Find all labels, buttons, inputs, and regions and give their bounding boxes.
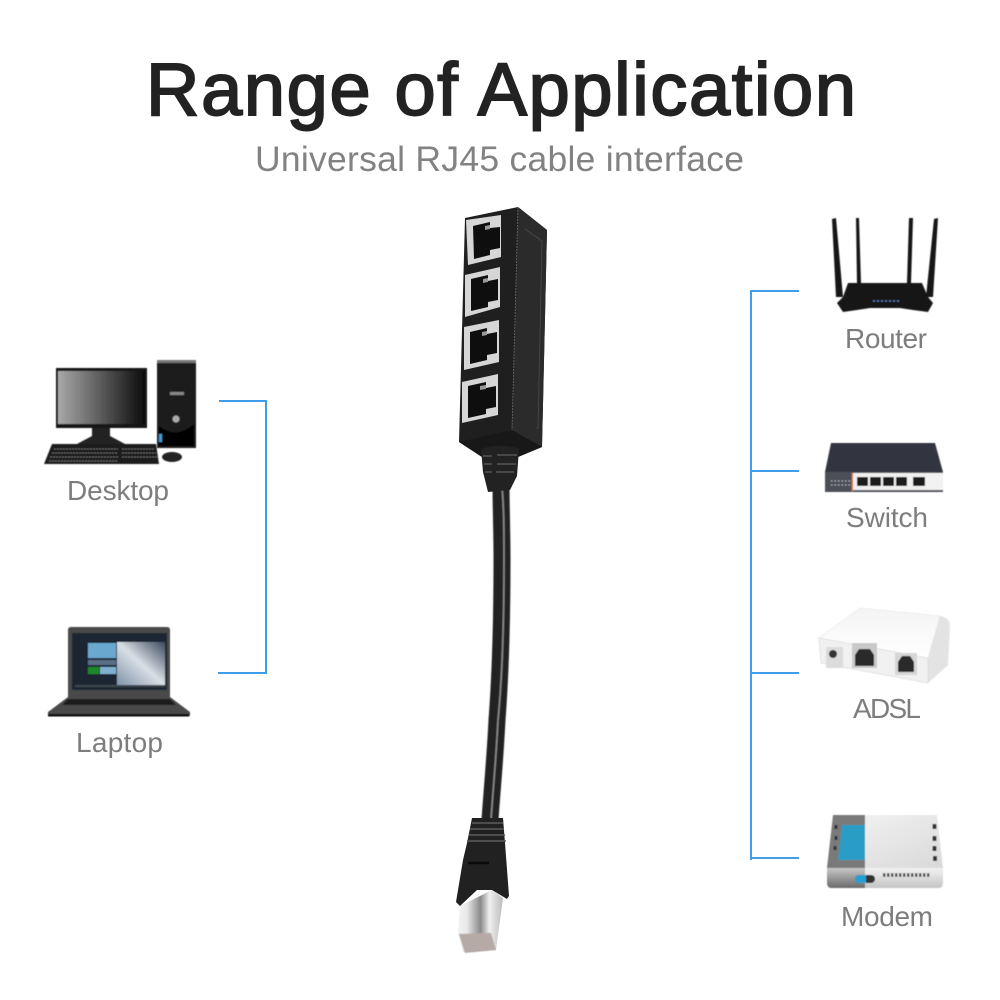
cable: [490, 483, 504, 820]
icon: network switch: [825, 443, 943, 492]
plug metal: [458, 890, 503, 952]
port 4: [462, 374, 498, 423]
device: Laptop: [48, 627, 190, 758]
label: ADSL: ADSL: [853, 693, 921, 724]
product: RJ45 splitter cable: [456, 207, 547, 953]
splitter body: [459, 207, 547, 457]
port 3: [464, 320, 499, 370]
device: Router: [832, 218, 938, 354]
device: Desktop: [44, 360, 196, 506]
icon: ADSL modem: [819, 608, 950, 683]
label: Router: Router: [845, 323, 927, 354]
icon: modem: [827, 815, 943, 888]
device: Modem: [827, 815, 943, 932]
strain relief: [481, 446, 519, 492]
label: Modem: Modem: [841, 901, 933, 932]
plug boot: [456, 818, 509, 906]
label: Laptop: Laptop: [76, 727, 163, 758]
connector lines: right bracket: [751, 291, 799, 860]
icon: desktop computer: [44, 360, 196, 464]
port 1: [466, 215, 501, 265]
RJ45 plug: [456, 818, 509, 953]
icon: router: [832, 218, 938, 312]
connector lines: left bracket: [218, 401, 266, 673]
label: Desktop: Desktop: [67, 475, 169, 506]
device: Switch: [825, 443, 943, 533]
device: ADSL: [819, 608, 950, 724]
icon: laptop: [48, 627, 190, 716]
label: Switch: Switch: [846, 502, 928, 533]
subtitle: Universal RJ45 cable interface: [255, 139, 744, 179]
title: Range of Application: [146, 48, 856, 131]
port 2: [465, 267, 500, 317]
